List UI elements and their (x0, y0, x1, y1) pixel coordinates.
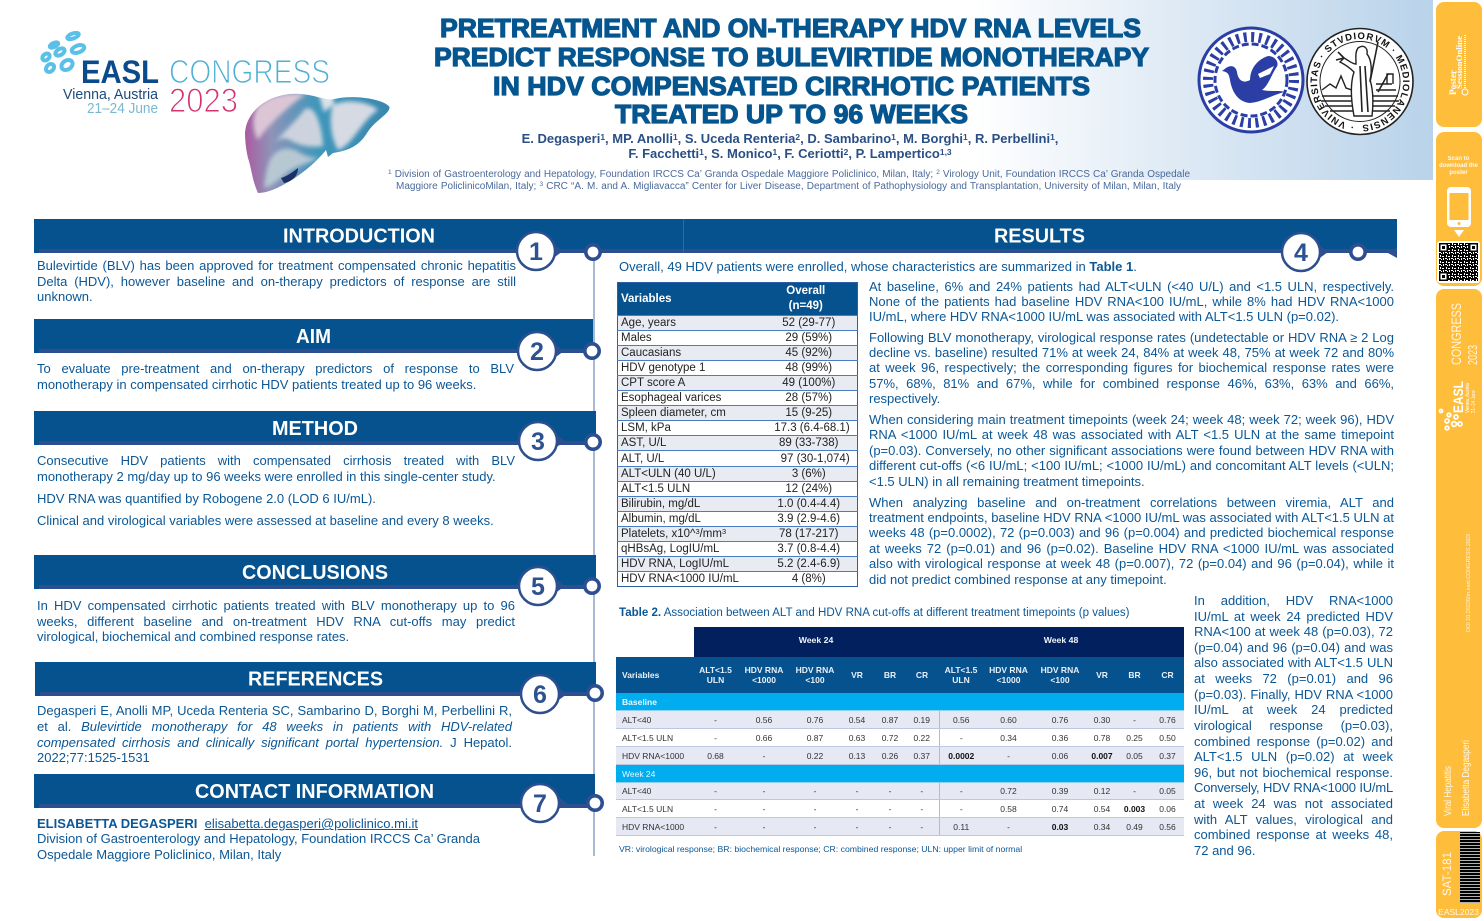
text: results paragraph, narrow column: In addition, HDV RNA<1000 (1194, 593, 1393, 608)
table 2 caption: Table 2. Association between ALT and HDV RNA cut-offs at different treatment timepoints (p values) (619, 607, 1129, 619)
table 2: associations: HDV RNA (989, 665, 1028, 675)
table 2: associations: 0.76 (807, 714, 823, 724)
text: references: et al. Bulevirtide monotherapy for 48 weeks in patients with HDV-related (37, 719, 512, 734)
table 1: patient characteristics: 3.7 (0.8-4.4) (777, 543, 840, 555)
table 1: patient characteristics: Platelets, x10^3/mm3 (621, 527, 726, 540)
title: PRETREATMENT AND ON-THERAPY HDV RNA LEVELS (440, 15, 1141, 43)
text: results paragraphs, right of table 1: respectively. (869, 391, 940, 406)
table 1: patient characteristics: CPT score A (621, 377, 685, 389)
table 2: associations: ULN (952, 675, 970, 685)
panel: congress and session details: 21–24 June (1471, 390, 1477, 413)
table 2: associations: 0.56 (756, 714, 772, 724)
table 1: patient characteristics: ALT<1.5 ULN (621, 483, 690, 495)
panel: scan to download: download the (1439, 163, 1478, 169)
panel: congress and session details (1436, 289, 1482, 828)
table 2: associations: 0.58 (1000, 804, 1017, 814)
text: contact information: Ospedale Maggiore Policlinico, Milan, Italy (37, 847, 281, 862)
table 2: associations: - (814, 804, 816, 814)
text: results paragraph, narrow column: ALT<1.5 ULN (p=0.02) at week (1194, 749, 1393, 764)
sidebar: poster session panels (1436, 2, 1482, 918)
text: results paragraphs, right of table 1: <1.5 ULN) in all remaining treatment timepoints. (869, 474, 1145, 489)
table 2: associations: - (814, 786, 816, 796)
text: results paragraphs, right of table 1: decline vs. baseline) resulted 71% at week 24, 84% at week 48, 75% at week 72 and 80% (869, 345, 1394, 360)
table 2: associations: 0.003 (1124, 804, 1145, 814)
panel: poster number and barcode (1436, 831, 1482, 918)
table 2: associations: BR (1128, 670, 1141, 680)
panel: scan to download: poster (1449, 170, 1468, 176)
authors (522, 131, 1058, 161)
heading: contact information: 7 (533, 790, 547, 818)
table 2: associations: - (714, 714, 717, 724)
table 2: associations: 0.34 (1000, 732, 1017, 742)
table 1: patient characteristics: 28 (57%) (785, 392, 832, 404)
table 2: associations: ALT<1.5 ULN (622, 732, 673, 742)
table 2: associations: 0.78 (1094, 732, 1110, 742)
authors: E. Degasperi1, MP. Anolli1, S. Uceda Renteria2, D. Sambarino1, M. Borghi1, R. Perbellini1, (522, 131, 1058, 146)
heading: aim: 2 (530, 338, 544, 366)
table 2: associations: 0.0002 (948, 750, 974, 760)
text: results paragraphs, right of table 1: IU/mL, where HDV RNA<1000 IU/mL was associated with ALT<1.5 ULN (p=0.02). (869, 309, 1339, 324)
panel: poster session online: Poster (1448, 70, 1458, 95)
heading: method: 3 (531, 428, 545, 456)
text: references: 2022;77:1525-1531 (37, 750, 150, 765)
table 1: patient characteristics: Age, years (621, 317, 676, 329)
text: method: Clinical and virological variables were assessed at baseline and every 8 weeks. (37, 513, 494, 528)
heading: contact information: CONTACT INFORMATION (195, 780, 434, 803)
heading: results: RESULTS (994, 224, 1085, 248)
icon: hexagon cluster (41, 32, 85, 74)
table 2: associations: 0.66 (756, 732, 772, 742)
table 1: patient characteristics: 17.3 (6.4-68.1) (774, 422, 850, 434)
table 2: associations: 0.37 (913, 750, 930, 760)
table 2: associations: 0.19 (913, 714, 930, 724)
table 2: associations: 0.05 (1126, 750, 1143, 760)
QR code (1437, 241, 1480, 283)
icon: phone (1447, 187, 1471, 227)
table 2: associations: 0.12 (1094, 786, 1110, 796)
text: introduction: unknown. (37, 289, 93, 304)
table 2: associations: - (1133, 714, 1136, 724)
table 2: associations: 0.50 (1159, 732, 1176, 742)
table 1: patient characteristics: HDV genotype 1 (621, 362, 705, 374)
table 2: associations: HDV RNA<1000 (622, 750, 684, 760)
table 2: associations: 0.37 (1159, 750, 1176, 760)
text: results paragraphs, right of table 1: RNA <1000 IU/mL at week 48 was associated with ALT <1.5 ULN at the same timepoint (869, 427, 1394, 442)
panel: congress and session details: 2023 (1465, 345, 1480, 365)
text: results paragraphs, right of table 1: did not predict combined response at any timepoint. (869, 572, 1167, 587)
table 1: patient characteristics: 78 (17-217) (779, 528, 838, 540)
text: aim (37, 361, 514, 392)
text: results paragraphs, right of table 1: different cut-offs (<6 IU/mL; <100 IU/mL; <1000 IU/mL) and concomitant ALT levels (<ULN; (869, 458, 1394, 473)
text: results paragraph, narrow column: IU/mL at week 24 predicted (1194, 702, 1393, 717)
table 2: associations: 0.56 (1159, 822, 1176, 832)
heading: contact information (34, 774, 602, 822)
title: TREATED UP TO 96 WEEKS (615, 101, 968, 129)
panel: scan to download: Scan to (1448, 156, 1470, 162)
table 2: associations: Baseline (622, 696, 657, 706)
text: contact information: ELISABETTA DEGASPERI elisabetta.degasperi@policlinico.mi.it (37, 816, 418, 831)
table 2: associations: 0.72 (882, 732, 898, 742)
text: conclusions: In HDV compensated cirrhotic patients treated with BLV monotherapy up to 96 (37, 598, 515, 613)
panel: poster number and barcode: SAT-181 (1440, 852, 1454, 896)
panel: poster number and barcode: EASL2023 (1438, 907, 1479, 917)
table 1: patient characteristics: (n=49) (789, 300, 823, 312)
table 2: associations: 0.22 (913, 732, 930, 742)
table 2: associations: 0.06 (1052, 750, 1068, 760)
title (434, 15, 1150, 129)
text: results paragraphs, right of table 1: (p=0.03). Conversely, no other significant associations were found between HDV RNA with (869, 443, 1394, 458)
panel: congress and session details: DOI 10.26226/m.easl.CONGRESS.2023 (1466, 534, 1472, 632)
text: method: Consecutive HDV patients with compensated cirrhosis treated with BLV (37, 453, 515, 468)
heading: introduction: 1 (529, 238, 543, 266)
table 2: associations (616, 657, 1184, 836)
text: results paragraphs, right of table 1: weeks 48 (p=0.0002), 72 (p=0.003) and 96 (p=0.004) and predicted biochemical response (869, 525, 1394, 540)
text: method: monotherapy 2 mg/day up to 96 weeks were enrolled in this single-center study. (37, 469, 496, 484)
table 2: associations: 0.007 (1091, 750, 1113, 760)
column divider (593, 258, 595, 856)
table 2: associations: HDV RNA (1041, 665, 1079, 675)
authors: F. Facchetti1, S. Monico1, F. Ceriotti2, P. Lampertico1,3 (628, 146, 952, 161)
table 2: week group header: Week 24 (799, 635, 833, 645)
table 2: associations: 0.63 (849, 732, 865, 742)
text: results intro: Overall, 49 HDV patients were enrolled, whose characteristics are summarized in Table 1. (619, 259, 1137, 274)
heading: aim: AIM (296, 325, 331, 348)
table 1: patient characteristics: LSM, kPa (621, 422, 671, 434)
text: contact information (37, 816, 480, 862)
table 2: associations: 0.54 (1094, 804, 1110, 814)
panel: poster session online: SessionOnline (1455, 36, 1464, 89)
table 2: associations: <100 (805, 675, 825, 685)
table 2: associations: 0.74 (1052, 804, 1068, 814)
text: references: compensated cirrhosis and clinically significant portal hypertension. J Hepatol. (37, 735, 512, 750)
text: introduction: Delta (HDV), however baseline and on-therapy predictors of response are still (37, 274, 516, 289)
table 2: associations: 0.72 (1000, 786, 1017, 796)
text: results paragraph, narrow column: (p=0.04) and 96 (p=0.04) and was (1194, 640, 1393, 655)
table 2: associations: VR (851, 670, 863, 680)
heading: references: 6 (533, 681, 547, 709)
table 1: patient characteristics: 48 (99%) (785, 362, 832, 374)
table 1: patient characteristics: 29 (59%) (785, 332, 832, 344)
table 2: associations: - (814, 822, 816, 832)
table 2: associations: 0.87 (807, 732, 823, 742)
panel: poster session online (1436, 2, 1482, 127)
text: results paragraphs, right of table 1: at weeks 72 (p=0.01) and 96 (p=0.02). Baseline HDV RNA <1000 IU/mL was associated (869, 541, 1394, 556)
table 2: associations: - (960, 804, 963, 814)
text: aim: To evaluate pre-treatment and on-therapy predictors of response to BLV (37, 361, 514, 376)
table 1: patient characteristics: 3.9 (2.9-4.6) (777, 513, 840, 525)
table 1: patient characteristics: AST, U/L (621, 437, 666, 449)
table 1: patient characteristics: HDV RNA<1000 IU/mL (621, 573, 739, 585)
text: references (37, 703, 512, 765)
table 2: associations: - (763, 786, 765, 796)
table 2: associations: ALT<1.5 (699, 665, 732, 675)
text: results paragraphs, right of table 1: treatment endpoints, baseline HDV RNA <1000 IU/mL was associated with ALT<1.5 ULN at (869, 510, 1394, 525)
table 1: patient characteristics: Caucasians (621, 347, 681, 359)
table 1: patient characteristics: 12 (24%) (785, 483, 832, 495)
table 1: patient characteristics: 15 (9-25) (785, 407, 832, 419)
text: references: Degasperi E, Anolli MP, Uceda Renteria SC, Sambarino D, Borghi M, Perbellini R, (37, 703, 512, 718)
heading: method: METHOD (272, 417, 358, 440)
table 2: associations: HDV RNA<1000 (622, 822, 684, 832)
table 2: associations: 0.87 (882, 714, 898, 724)
table 2: associations: - (1007, 750, 1010, 760)
text: method (37, 453, 515, 528)
text: results paragraphs, right of table 1: At baseline, 6% and 24% patients had ALT<ULN (<40 U/L) and <1.5 ULN, respectively. (869, 279, 1394, 294)
panel: congress and session details: CONGRESS (1449, 303, 1464, 365)
table 2: associations: 0.68 (707, 750, 724, 760)
table 1: patient characteristics: HDV RNA, LogIU/mL (621, 558, 729, 570)
table 2: associations: 0.76 (1052, 714, 1068, 724)
table 2: associations: - (920, 822, 923, 832)
table 2: associations: <1000 (752, 675, 776, 685)
affiliations: 1 Division of Gastroenterology and Hepatology, Foundation IRCCS Ca’ Granda Ospedale Maggiore Policlinico, Milan, Italy; 2 Virology Unit, Foundation IRCCS Ca’ Granda Ospedale (388, 169, 1190, 180)
table 2: associations: 0.13 (849, 750, 865, 760)
table 2: associations: 0.30 (1094, 714, 1110, 724)
table 2: associations: <1000 (997, 675, 1020, 685)
text: results paragraph, narrow column: at weeks 72 (p=0.01) and 96 (1194, 671, 1393, 686)
text: results paragraph, narrow column: with ALT values, virological and (1194, 812, 1393, 827)
table 2: associations: 0.56 (953, 714, 970, 724)
table 2: associations: - (714, 732, 717, 742)
heading: conclusions (34, 555, 599, 605)
table 2: associations: - (889, 786, 891, 796)
text: results paragraphs, right of table 1: None of the patients had baseline HDV RNA<100 IU/mL, while 8% had HDV RNA<1000 (869, 294, 1394, 309)
table 2: associations: - (714, 822, 717, 832)
table 1: patient characteristics: Spleen diameter, cm (621, 407, 726, 419)
table 2: associations: ULN (707, 675, 724, 685)
table 2: associations: Variables (622, 670, 659, 680)
heading: introduction: INTRODUCTION (283, 224, 435, 248)
table 2: associations: - (889, 822, 891, 832)
icon: liver (245, 94, 390, 193)
table 1: patient characteristics: ALT<ULN (40 U/L) (621, 468, 716, 480)
table 2: associations: - (960, 732, 963, 742)
text: contact information: Division of Gastroenterology and Hepatology, Foundation IRCCS Ca’ Granda (37, 831, 480, 846)
table 2: associations: 0.39 (1052, 786, 1068, 796)
text: method: HDV RNA was quantified by Robogene 2.0 (LOD 6 IU/mL). (37, 491, 376, 506)
affiliations (388, 169, 1190, 192)
table 2: associations: BR (884, 670, 896, 680)
table 1: patient characteristics: Bilirubin, mg/dL (621, 498, 700, 510)
wordmark: Vienna, Austria: Vienna, Austria (63, 86, 159, 103)
text: conclusions (37, 598, 515, 644)
table 1: patient characteristics (617, 282, 858, 587)
text: results paragraph, narrow column: RNA<100 at week 48 (p=0.03), 72 (1194, 624, 1393, 639)
table 2: associations: 0.26 (882, 750, 898, 760)
table 2: associations: 0.25 (1126, 732, 1143, 742)
table 1: patient characteristics: 4 (8%) (792, 573, 826, 585)
table 1: patient characteristics: Overall (786, 285, 825, 297)
panel: congress and session details: Vienna, Austria (1465, 382, 1471, 413)
table 2: associations: 0.22 (807, 750, 823, 760)
table 2: associations: - (856, 822, 858, 832)
table 1: patient characteristics: 97 (30-1,074) (781, 452, 850, 464)
table 2: associations: ALT<1.5 ULN (622, 804, 673, 814)
header background band (0, 0, 1433, 180)
logo: blue institutional seal (1198, 26, 1304, 134)
table 1: patient characteristics: 45 (92%) (785, 347, 832, 359)
table 2: associations: Week 24 (622, 768, 655, 778)
table 2: associations: HDV RNA (796, 665, 834, 675)
table 2: associations: - (714, 804, 717, 814)
text: results paragraph, narrow column: virological response (p=0.03), (1194, 718, 1393, 733)
table 2: associations: - (960, 786, 963, 796)
logo: University of Milan seal: · VNIVERSITAS · STVDIORVM · MEDIOLANENSIS (1310, 32, 1410, 132)
table 2: associations: 0.05 (1159, 786, 1176, 796)
panel: scan to download (1436, 132, 1482, 286)
table 2 footnote: VR: virological response; BR: biochemical response; CR: combined response; ULN: upper limit of normal (619, 844, 1022, 854)
table 2: associations: - (856, 804, 858, 814)
table 2: associations: <100 (1050, 675, 1070, 685)
table 2: associations: 0.76 (1159, 714, 1176, 724)
text: introduction (37, 258, 516, 304)
table 2: associations: VR (1096, 670, 1108, 680)
text: results paragraph, narrow column: combined response (p=0.02) and (1194, 734, 1393, 749)
table 2: associations: 0.03 (1052, 822, 1068, 832)
table 1: patient characteristics: qHBsAg, LogIU/mL (621, 543, 719, 555)
table 2: associations: HDV RNA (745, 665, 783, 675)
text: results paragraphs, right of table 1: at week 96, respectively; the corresponding figures for biochemical response rates were (869, 360, 1394, 375)
text: results paragraphs, right of table 1: also with virological response at week 48 (p=0.007), 72 (p=0.04) and 96 (p=0.04), while it (869, 556, 1394, 571)
table 2: associations: - (920, 804, 923, 814)
text: conclusions: virological, biochemical and combined response rates. (37, 629, 349, 644)
table 1: patient characteristics: 3 (6%) (792, 468, 826, 480)
table 2: associations: ALT<1.5 (945, 665, 977, 675)
heading: results: 4 (1294, 239, 1308, 267)
table 1: patient characteristics: 49 (100%) (782, 377, 835, 389)
heading: references (35, 662, 602, 713)
text: results paragraphs, right of table 1: When considering main treatment timepoints (week 24; week 48; week 72; week 96), HDV (869, 412, 1394, 427)
heading: references: REFERENCES (248, 668, 383, 690)
table 2: associations: - (1133, 786, 1136, 796)
text: results paragraphs, right of table 1: 57%, 68%, 81% and 67%, while for combined response 46%, 63%, 63% and 66%, (869, 376, 1394, 391)
text: results paragraph, narrow column: at week 24 was not associated (1194, 796, 1393, 811)
table 2: associations: ALT<40 (622, 786, 651, 796)
wordmark: EASL: EASL (81, 54, 159, 90)
table 2: associations: 0.34 (1094, 822, 1110, 832)
icon: down arrow (1454, 230, 1464, 237)
panel: congress and session details: Elisabetta Degasperi (1461, 740, 1472, 816)
text: results paragraph, narrow column: (p=0.03). Finally, HDV RNA <1000 (1194, 687, 1393, 702)
text: results paragraph, narrow column: also associated with ALT<1.5 ULN (1194, 655, 1393, 670)
heading: results (683, 219, 1397, 271)
affiliations: Maggiore PoliclinicoMilan, Italy; 3 CRC “A. M. and A. Migliavacca” Center for Liver Disease, Department of Pathophysiology and Transplantation, University of Milan, Milan, Italy (396, 181, 1181, 192)
table 2: associations: - (763, 822, 765, 832)
table 2: associations: 0.11 (953, 822, 969, 832)
icon: hexagons (1440, 410, 1462, 430)
title: IN HDV COMPENSATED CIRRHOTIC PATIENTS (493, 73, 1090, 101)
wordmark: dates: 21–24 June (87, 101, 158, 117)
table 1: patient characteristics: Albumin, mg/dL (621, 513, 701, 525)
table 2: associations: - (714, 786, 717, 796)
table 2: associations: 0.06 (1159, 804, 1176, 814)
table 2: associations: - (920, 786, 923, 796)
text: results paragraphs, right of table 1: Following BLV monotherapy, virological response rates (undetectable or HDV RNA ≥ 2 Log (869, 330, 1394, 345)
heading: introduction (34, 219, 684, 270)
table 1: patient characteristics: ALT, U/L (621, 452, 664, 464)
panel: congress and session details: Viral Hepatitis (1443, 766, 1454, 816)
wordmark: 2023: 2023 (169, 82, 238, 120)
table 1: patient characteristics: Males (621, 332, 652, 344)
table 1: patient characteristics: 89 (33-738) (779, 437, 838, 449)
table 1: patient characteristics: 1.0 (0.4-4.4) (777, 498, 840, 510)
table 2: associations: - (763, 804, 765, 814)
heading: conclusions: CONCLUSIONS (242, 561, 388, 584)
text: results paragraph, narrow column: 96, but not biochemical response. (1194, 765, 1393, 780)
table 2: associations: 0.54 (849, 714, 865, 724)
text: results paragraph, narrow column (1194, 593, 1393, 858)
table 2: associations: - (1007, 822, 1010, 832)
table 1: patient characteristics: 5.2 (2.4-6.9) (777, 558, 840, 570)
table 1: patient characteristics: Esophageal varices (621, 392, 721, 404)
text: introduction: Bulevirtide (BLV) has been approved for treatment compensated chronic hepatitis (37, 258, 516, 273)
heading: aim (34, 319, 599, 370)
table 2: associations: 0.36 (1052, 732, 1068, 742)
table 2: associations: 0.49 (1126, 822, 1143, 832)
text: results paragraph, narrow column: Conversely, HDV RNA<1000 IU/mL (1194, 780, 1393, 795)
table 2: associations: CR (916, 670, 928, 680)
table 2: week group header (694, 627, 1184, 657)
heading: method (34, 411, 600, 460)
text: conclusions: weeks, different baseline and on-treatment HDV RNA cut-offs may predict (37, 614, 515, 629)
table 2: associations: - (889, 804, 891, 814)
table 2: associations: 0.60 (1000, 714, 1017, 724)
text: results paragraphs, right of table 1 (869, 279, 1394, 587)
table 2: associations: ALT<40 (622, 714, 651, 724)
table 2: associations: - (763, 750, 765, 760)
text: results paragraph, narrow column: 72 and 96. (1194, 843, 1255, 858)
text: results paragraph, narrow column: IU/mL at week 24 predicted HDV (1194, 609, 1393, 624)
title: PREDICT RESPONSE TO BULEVIRTIDE MONOTHERAPY (434, 44, 1149, 72)
wordmark: CONGRESS: CONGRESS (169, 53, 330, 90)
text: results paragraph, narrow column: combined response at weeks 48, (1194, 827, 1393, 842)
text: results paragraphs, right of table 1: When analyzing baseline and on-treatment correlations between viremia, ALT and (869, 495, 1394, 510)
table 1: patient characteristics: 52 (29-77) (782, 317, 835, 329)
table 1: patient characteristics: Variables (621, 292, 672, 304)
text: aim: monotherapy in compensated cirrhotic HDV patients treated up to 96 weeks. (37, 377, 476, 392)
table 2: week group header: Week 48 (1044, 635, 1078, 645)
table 2: associations: - (856, 786, 858, 796)
table 2: associations: CR (1161, 670, 1174, 680)
heading: conclusions: 5 (531, 573, 545, 601)
logo: EASL Congress 2023 (40, 30, 390, 193)
panel: congress and session details: EASL (1450, 381, 1466, 413)
